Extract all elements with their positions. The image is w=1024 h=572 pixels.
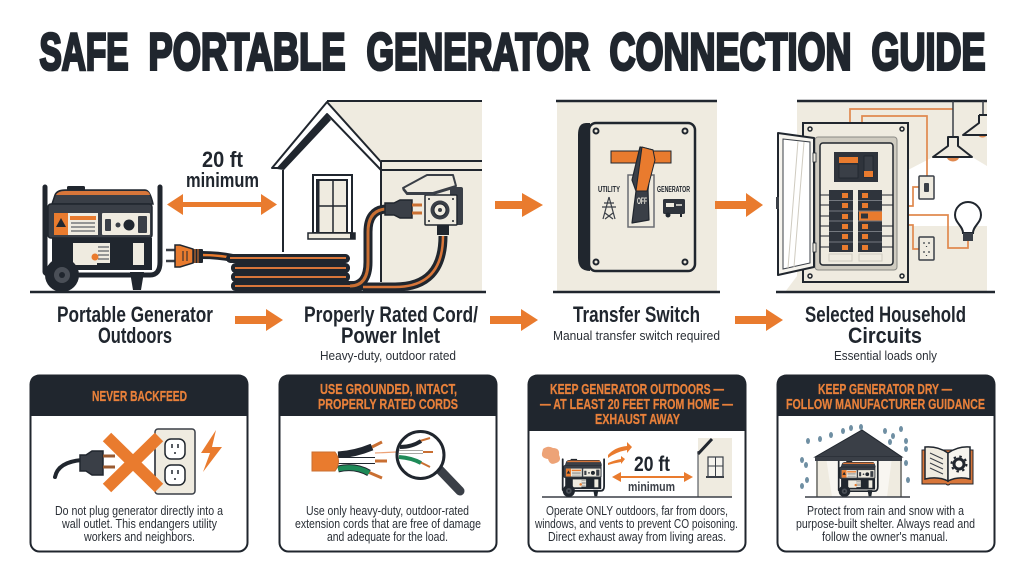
body text: Protect from rain and snow with a <box>807 504 964 518</box>
icon: coiled cord and plug <box>166 200 443 291</box>
label: portable generator: Portable Generator <box>57 302 213 327</box>
body text: extension cords that are free of damage <box>295 517 481 531</box>
label: selected household circuits: Selected Household <box>805 302 966 327</box>
icon: ceiling lamps <box>933 101 987 162</box>
heading <box>540 382 733 428</box>
house wall <box>272 101 482 292</box>
body text: workers and neighbors. <box>83 530 195 544</box>
panel: household circuits <box>776 101 995 292</box>
title: PORTABLE <box>148 24 346 82</box>
label: transfer switch: Manual transfer switch required <box>553 329 720 343</box>
label: properly rated cord: Power Inlet <box>341 323 441 348</box>
label: properly rated cord: Heavy-duty, outdoor rated <box>320 349 456 363</box>
heading: USE GROUNDED, INTACT, <box>320 382 457 398</box>
icon: generator with exhaust and distance: minimum <box>628 479 675 494</box>
panel: cords <box>279 375 497 552</box>
arrow: inlet to transfer switch <box>495 193 543 217</box>
panel: transfer switch <box>553 101 720 292</box>
icon: utility pylon <box>602 197 616 219</box>
body text <box>796 504 975 544</box>
heading: — AT LEAST 20 FEET FROM HOME — <box>540 397 733 413</box>
body text <box>295 504 481 544</box>
20 ft minimum distance label: 20 ft <box>202 147 244 172</box>
icon: canopy shelter with rain <box>800 424 910 497</box>
heading: KEEP GENERATOR DRY — <box>818 382 952 398</box>
body text <box>534 504 738 544</box>
title: SAFE <box>40 24 128 82</box>
arrow: label 3 to 4 <box>735 309 783 331</box>
heading <box>786 382 985 413</box>
body text: windows, and vents to prevent CO poisoning. <box>534 517 738 531</box>
icon: power inlet <box>403 175 463 235</box>
label: transfer switch <box>553 302 720 343</box>
utility label: UTILITY <box>598 185 620 194</box>
body text: and adequate for the load. <box>327 530 448 544</box>
label: properly rated cord: Properly Rated Cord/ <box>304 302 478 327</box>
ground line <box>30 291 486 293</box>
label: properly rated cord <box>304 302 478 363</box>
title <box>40 24 986 82</box>
panel: keep generator dry <box>777 375 995 552</box>
20 ft minimum distance label <box>186 147 259 192</box>
body text: Use only heavy-duty, outdoor-rated <box>306 504 469 518</box>
label: selected household circuits: Circuits <box>848 323 922 348</box>
heading: KEEP GENERATOR OUTDOORS — <box>550 382 724 398</box>
body text: Direct exhaust away from living areas. <box>548 530 726 544</box>
icon: mini generator <box>663 199 685 218</box>
heading: EXHAUST AWAY <box>595 412 680 428</box>
icon: switch enclosure <box>578 123 695 271</box>
label: selected household circuits: Essential loads only <box>834 349 938 363</box>
label: portable generator: Outdoors <box>98 323 172 348</box>
panel: never backfeed <box>30 375 248 552</box>
icon: house window <box>308 175 355 239</box>
body text: wall outlet. This endangers utility <box>61 517 218 531</box>
icon: light bulb <box>955 202 981 241</box>
icon: generator with exhaust and distance <box>542 438 732 497</box>
title: CONNECTION <box>610 24 852 82</box>
arrow: label 1 to 2 <box>235 309 283 331</box>
arrow: switch to circuits <box>715 193 763 217</box>
label: selected household circuits <box>805 302 966 363</box>
label: portable generator <box>57 302 213 348</box>
arrow: label 2 to 3 <box>490 309 538 331</box>
body text <box>55 504 223 544</box>
generator label: GENERATOR <box>657 185 690 194</box>
panel: step 1 generator and cord scene <box>30 101 486 292</box>
icon: intact cord with magnifier <box>312 432 460 491</box>
icon: generator with exhaust and distance: 20 ft <box>634 453 670 476</box>
body text: Do not plug generator directly into a <box>55 504 223 518</box>
heading: PROPERLY RATED CORDS <box>318 397 458 413</box>
title: GENERATOR <box>366 24 590 82</box>
20 ft minimum distance label: minimum <box>186 170 259 192</box>
body text: purpose-built shelter. Always read and <box>796 517 975 531</box>
icon: plug crossed out at outlet <box>55 429 222 494</box>
icon: wall outlet <box>919 237 934 260</box>
heading <box>318 382 458 413</box>
open panel door <box>776 133 816 275</box>
icon: owner's manual book <box>922 447 973 485</box>
icon: portable generator <box>45 186 160 292</box>
body text: follow the owner's manual. <box>822 530 948 544</box>
label: transfer switch: Transfer Switch <box>573 302 700 327</box>
heading: NEVER BACKFEED <box>92 389 187 405</box>
body text: Operate ONLY outdoors, far from doors, <box>546 504 728 518</box>
icon: wall switch <box>919 176 934 199</box>
breaker box <box>803 123 908 282</box>
switch off label: OFF <box>637 196 647 206</box>
arrow: 20 ft double-headed <box>167 194 277 215</box>
wiring <box>850 109 968 249</box>
panel: keep generator outdoors <box>528 375 746 552</box>
